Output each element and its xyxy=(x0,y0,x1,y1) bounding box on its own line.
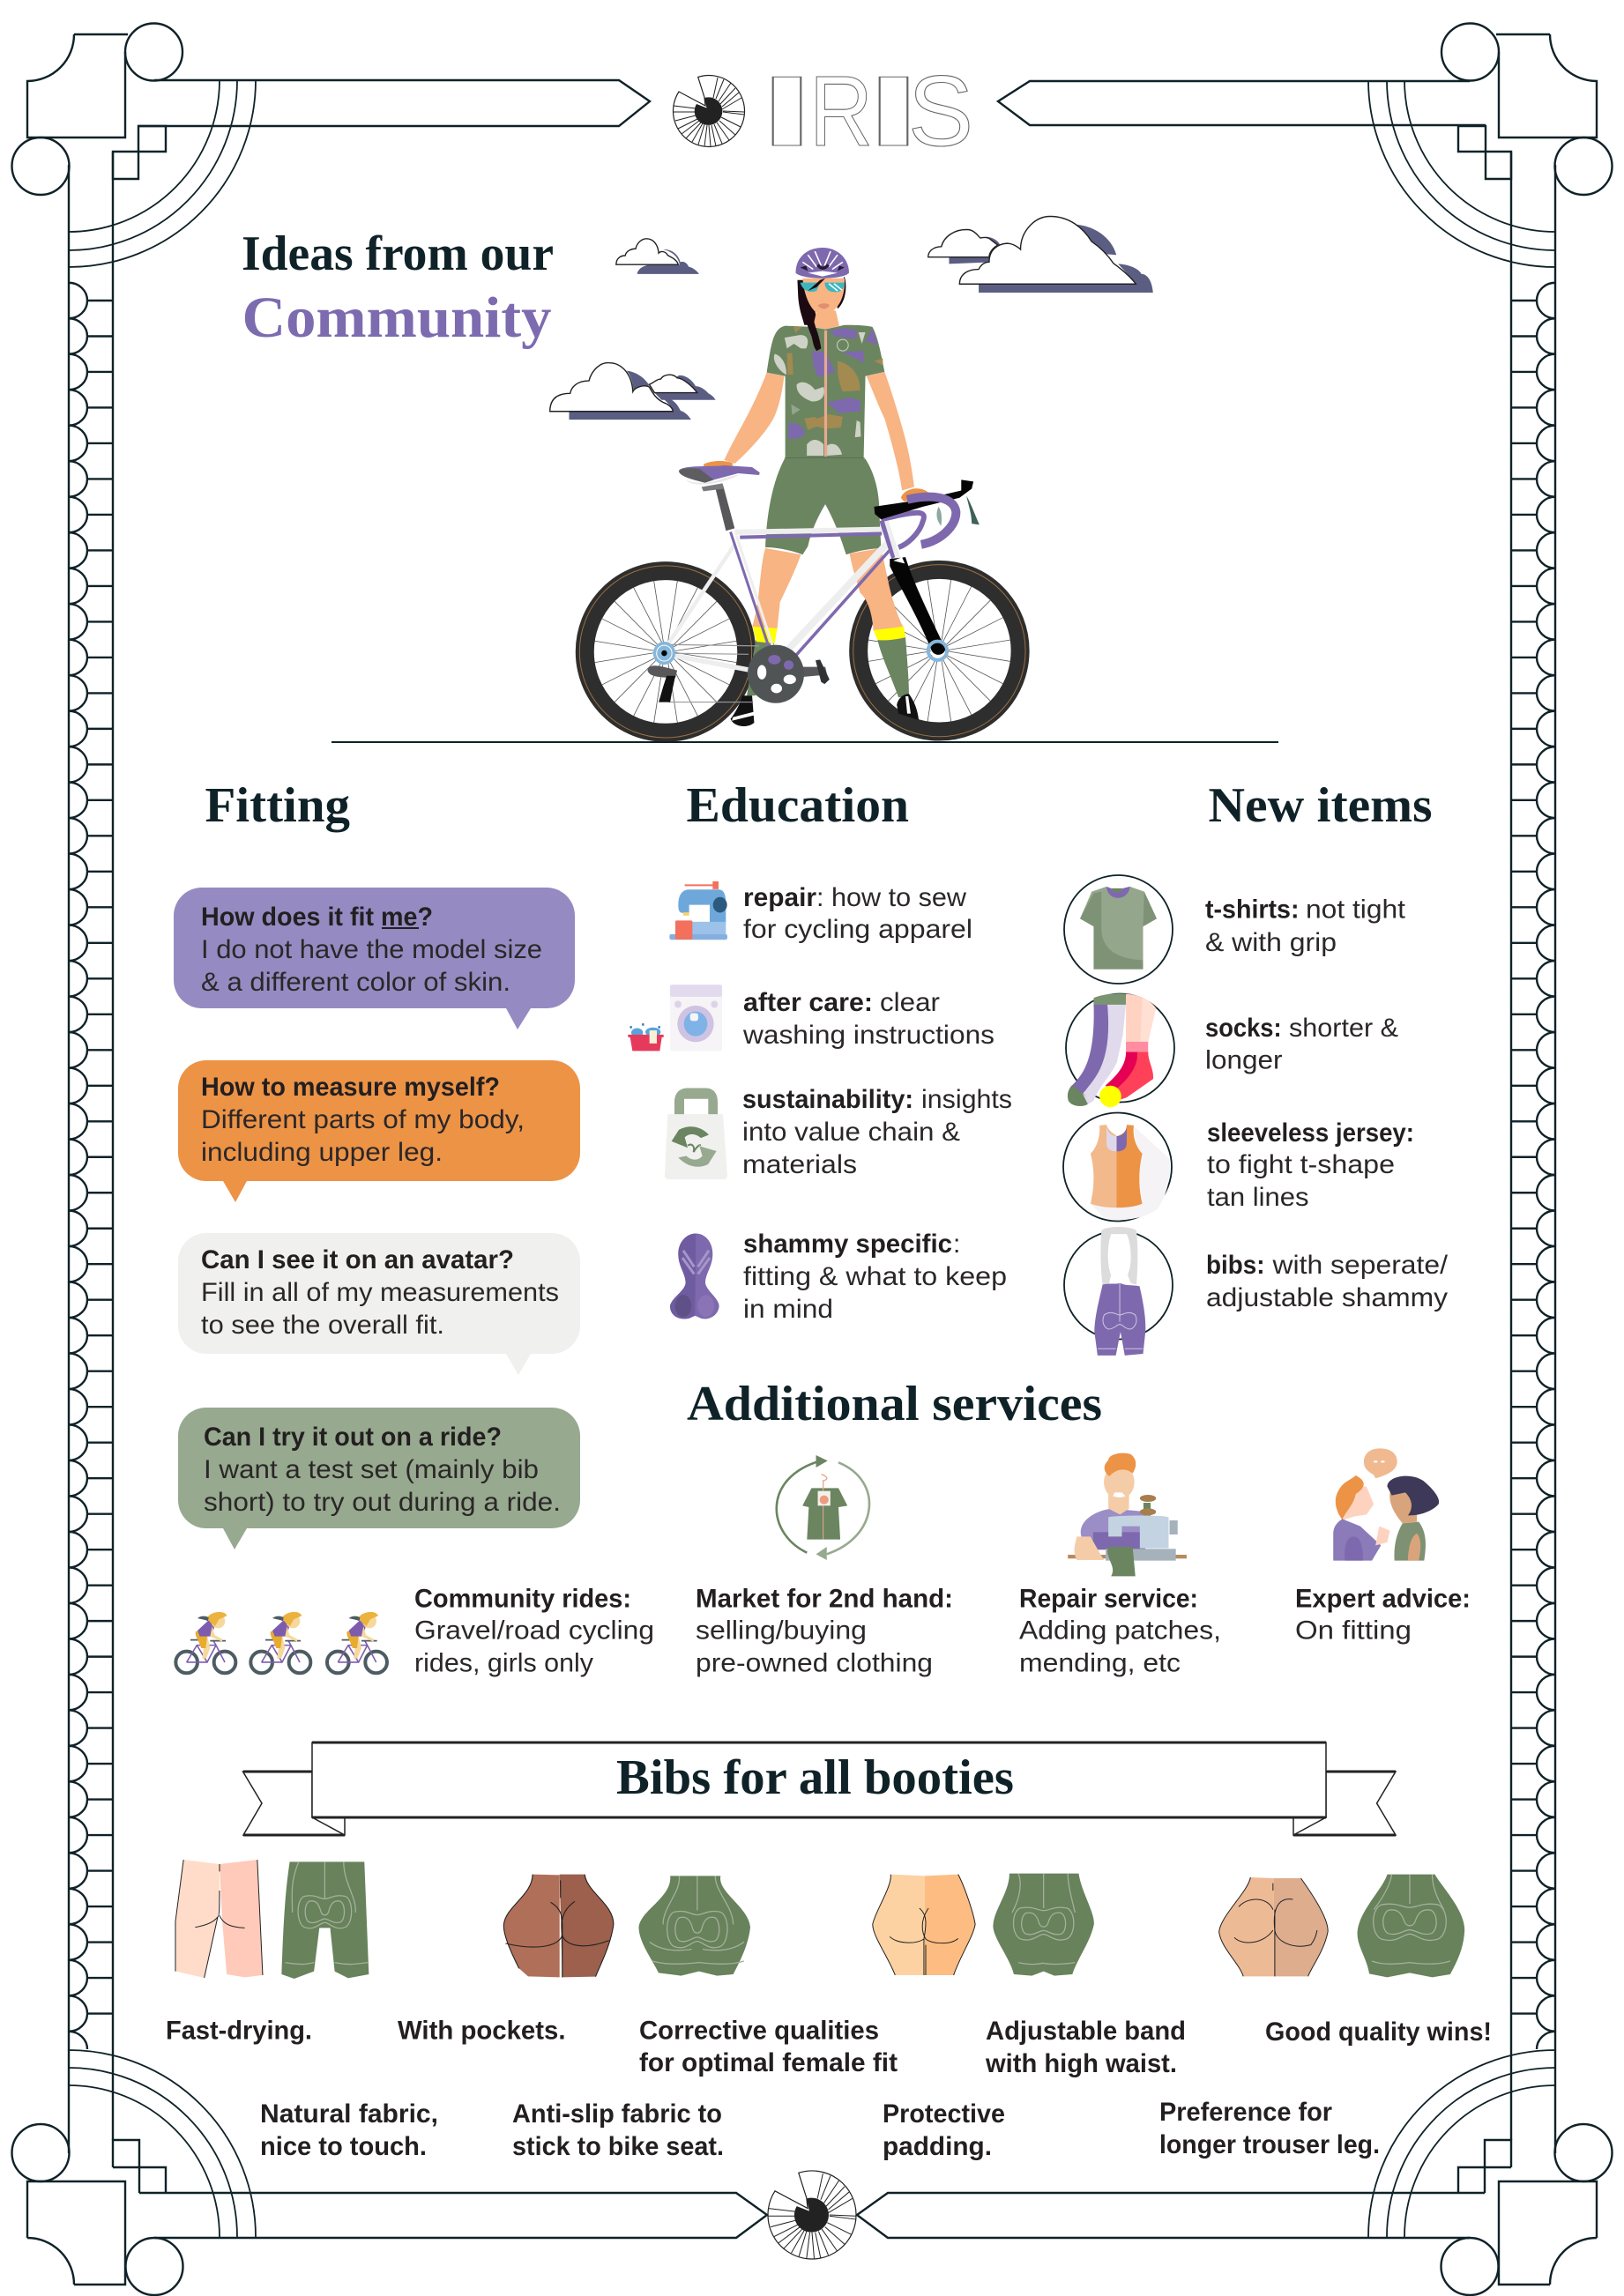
new items text: with seperate/ xyxy=(1271,1251,1449,1280)
far leg and shoe xyxy=(731,639,775,726)
sunglasses xyxy=(801,279,845,292)
bib features text: nice to touch. xyxy=(260,2132,427,2161)
new items text: & with grip xyxy=(1205,928,1337,957)
speech bubble: how does it fit me: & a different color of skin. xyxy=(201,968,510,997)
new items text: not tight xyxy=(1306,895,1406,924)
education text: shammy specific xyxy=(743,1230,952,1259)
bib features text: for optimal female fit xyxy=(639,2048,898,2077)
market text: pre-owned clothing xyxy=(696,1648,933,1678)
market text: selling/buying xyxy=(696,1616,867,1645)
education text: insights xyxy=(921,1085,1012,1114)
hair behind xyxy=(797,277,846,325)
drivetrain xyxy=(647,642,830,703)
speech bubble: try on a ride: I want a test set (mainly bib xyxy=(204,1455,539,1484)
bib features text: stick to bike seat. xyxy=(512,2132,724,2161)
speech bubble: how does it fit me xyxy=(174,888,575,1029)
logo: wheel mark top xyxy=(674,75,745,146)
community rides text: Community rides: xyxy=(414,1585,631,1613)
front wheel xyxy=(853,565,1025,737)
education text: clear xyxy=(880,988,940,1017)
speech bubble: how to measure myself xyxy=(178,1060,580,1202)
education text: materials xyxy=(742,1150,857,1179)
title: Ideas from our xyxy=(242,227,554,281)
bib features text: With pockets. xyxy=(398,2017,566,2045)
bib features text: Corrective qualities xyxy=(639,2017,879,2045)
speech bubble: how to measure myself: including upper leg. xyxy=(201,1138,443,1167)
ribbon banner: Bibs for all booties xyxy=(616,1750,1014,1805)
icon: circular market garment xyxy=(777,1455,869,1560)
bib features text: Preference for xyxy=(1159,2098,1332,2127)
body 4 xyxy=(1219,1877,1328,1976)
bib 4 xyxy=(1358,1875,1464,1977)
new items text: bibs: xyxy=(1206,1251,1265,1280)
education text: sustainability: xyxy=(742,1085,913,1114)
title: Community xyxy=(242,286,552,350)
icon: sewing machine xyxy=(669,881,727,940)
heading: Education: Education xyxy=(686,778,909,833)
education text: after care: xyxy=(743,988,873,1017)
fork xyxy=(890,557,947,660)
heading: Additional services: Additional services xyxy=(687,1377,1102,1431)
community rides text: Gravel/road cycling xyxy=(414,1616,654,1645)
icon: shammy pad xyxy=(670,1234,719,1319)
repair service text: mending, etc xyxy=(1019,1648,1181,1678)
speech bubble: avatar: Fill in all of my measurements xyxy=(201,1278,559,1307)
community rides text xyxy=(414,1585,654,1678)
speech bubble: how does it fit me: I do not have the model size xyxy=(201,935,542,964)
speech bubble: try on a ride: Can I try it out on a ride? xyxy=(204,1423,502,1452)
icon: sleeveless jersey xyxy=(1063,1112,1172,1222)
bib features text: Natural fabric, xyxy=(260,2099,438,2129)
bib features text: Good quality wins! xyxy=(1265,2017,1492,2047)
expert advice text: On fitting xyxy=(1295,1616,1412,1645)
braid xyxy=(802,305,821,351)
icon: socks xyxy=(1066,993,1174,1107)
bib 3 xyxy=(993,1874,1094,1976)
icon: t-shirt xyxy=(1064,875,1173,984)
community rides text: rides, girls only xyxy=(414,1648,593,1678)
market text xyxy=(696,1585,953,1678)
bib features text xyxy=(166,2017,1492,2161)
education text xyxy=(742,883,1012,1324)
icon: recycling tote bag xyxy=(665,1089,727,1179)
repair service text: Repair service: xyxy=(1019,1585,1198,1613)
handlebar xyxy=(874,479,980,547)
title xyxy=(242,227,554,350)
helmet xyxy=(795,248,849,279)
logo: IRIS wordmark xyxy=(760,56,973,167)
icon: repair service person xyxy=(1068,1453,1187,1576)
icon: three cyclists xyxy=(175,1612,387,1673)
new items text: to fight t-shape xyxy=(1207,1150,1395,1179)
repair service text: Adding patches, xyxy=(1019,1616,1221,1645)
ribbon banner xyxy=(243,1742,1396,1835)
new items text: sleeveless jersey: xyxy=(1207,1118,1414,1148)
hero illustration: clouds xyxy=(550,217,1153,420)
new items text: shorter & xyxy=(1289,1014,1398,1043)
logo: IRIS wordmark: I xyxy=(867,56,920,167)
expert advice text: Expert advice: xyxy=(1295,1585,1471,1613)
new items text xyxy=(1205,895,1449,1312)
speech bubble: try on a ride: short) to try out during a ride. xyxy=(204,1488,561,1517)
heading: Fitting: Fitting xyxy=(205,778,350,833)
body 3 xyxy=(873,1875,975,1975)
bib features text: with high waist. xyxy=(985,2049,1177,2078)
body 1 xyxy=(175,1860,263,1978)
bib features text: Protective xyxy=(883,2099,1005,2129)
near leg, sock and shoe xyxy=(877,637,919,720)
education text: fitting & what to keep xyxy=(743,1262,1007,1291)
ground line xyxy=(332,741,1278,743)
bib features text: longer trouser leg. xyxy=(1159,2130,1380,2159)
heading: New items: New items xyxy=(1208,778,1432,833)
speech bubble: how to measure myself: How to measure myself? xyxy=(201,1073,500,1102)
education text: into value chain & xyxy=(742,1118,960,1147)
new items text: adjustable shammy xyxy=(1206,1283,1448,1312)
shorts xyxy=(765,459,881,554)
education text: in mind xyxy=(743,1295,833,1324)
bib 1 xyxy=(281,1861,369,1979)
logo: wheel mark bottom xyxy=(768,2171,856,2259)
new items text: longer xyxy=(1205,1046,1282,1075)
logo: IRIS wordmark: I xyxy=(760,56,814,167)
speech bubble: avatar: Can I see it on an avatar? xyxy=(201,1245,514,1274)
speech bubble: avatar: to see the overall fit. xyxy=(201,1311,444,1340)
neck and face xyxy=(802,279,845,330)
legs xyxy=(752,548,905,643)
speech bubble: try on a ride xyxy=(178,1408,580,1549)
icon: expert advice people xyxy=(1333,1448,1439,1561)
bib features text: Fast-drying. xyxy=(166,2017,312,2045)
bike frame xyxy=(667,474,900,671)
logo: IRIS wordmark: S xyxy=(908,56,973,167)
new items text: t-shirts: xyxy=(1205,895,1300,924)
rear wheel xyxy=(579,566,752,738)
education text: : xyxy=(953,1230,960,1259)
jersey xyxy=(767,325,884,459)
logo: IRIS wordmark: R xyxy=(809,56,873,167)
icon: bib shorts xyxy=(1064,1227,1173,1356)
new items text: socks: xyxy=(1205,1014,1282,1043)
arms xyxy=(724,372,914,491)
market text: Market for 2nd hand: xyxy=(696,1585,953,1613)
body shapes and bibs row xyxy=(175,1860,1464,1979)
repair service text xyxy=(1019,1585,1221,1678)
speech bubble: how to measure myself: Different parts of my body, xyxy=(201,1105,525,1134)
hero illustration: cyclist with road bike xyxy=(579,248,1025,738)
speech bubble: avatar xyxy=(178,1233,580,1375)
saddle and hand xyxy=(679,461,760,483)
education text: repair xyxy=(743,883,816,912)
icon: washing machine and basin xyxy=(628,985,722,1051)
education text: for cycling apparel xyxy=(743,915,972,944)
education text: washing instructions xyxy=(742,1021,995,1050)
bib features text: Anti-slip fabric to xyxy=(512,2099,722,2129)
new items text: tan lines xyxy=(1207,1183,1308,1212)
education text: : how to sew xyxy=(816,883,966,912)
expert advice text xyxy=(1295,1585,1471,1645)
bib features text: Adjustable band xyxy=(986,2017,1186,2046)
bib 2 xyxy=(638,1876,750,1976)
speech bubble: how does it fit me: How does it fit me? xyxy=(201,903,433,932)
bib features text: padding. xyxy=(883,2132,992,2161)
body 2 xyxy=(503,1875,614,1977)
